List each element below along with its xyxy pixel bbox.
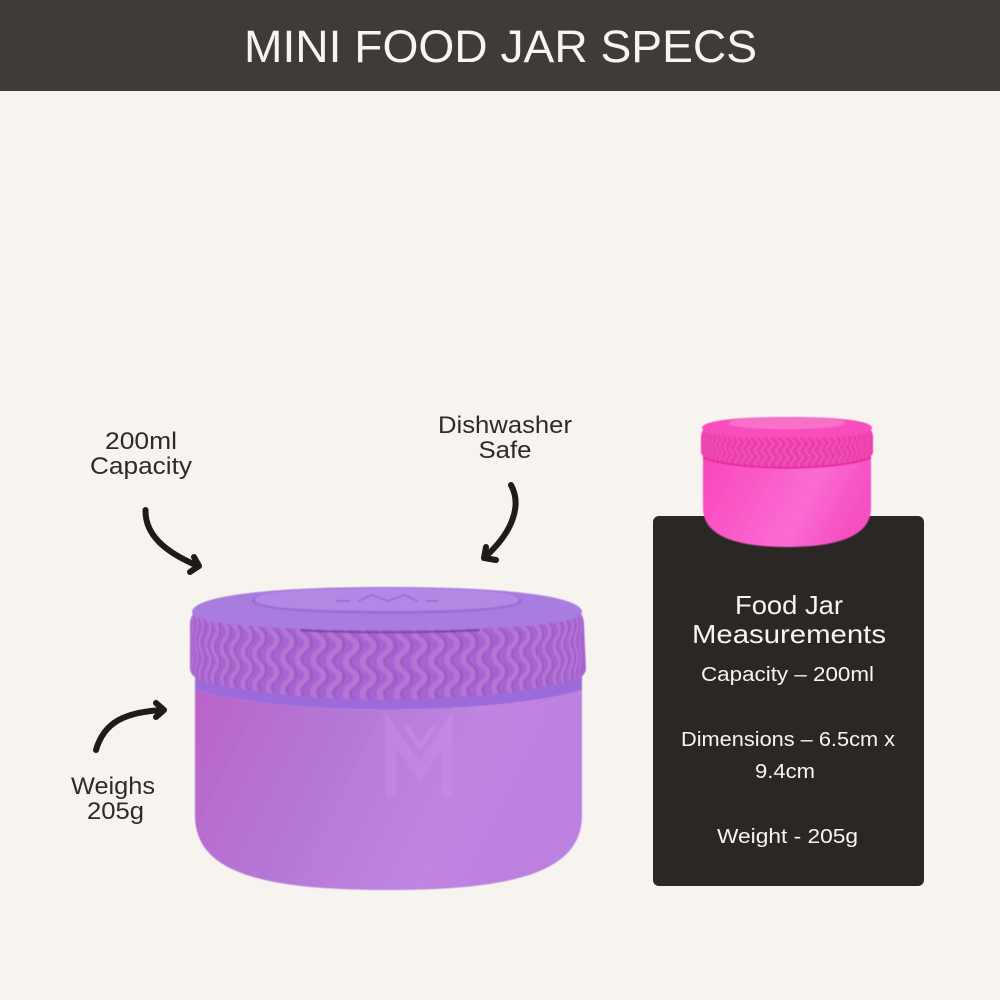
panel spec list: 9.4cm (755, 760, 815, 783)
lid logo (336, 595, 438, 601)
arrow: dishwasher safe to jar lid (484, 485, 516, 560)
panel heading: Food Jar (735, 590, 843, 620)
panel spec list: Dimensions – 6.5cm x (681, 728, 896, 751)
neck band (195, 665, 582, 710)
arrow: weighs to jar body (96, 703, 164, 750)
small jar body (703, 450, 871, 547)
small jar lid (702, 417, 872, 438)
small pink jar (701, 417, 873, 547)
panel heading: Measurements (692, 619, 886, 649)
lid disc (252, 588, 522, 614)
label: dishwasher safe: Dishwasher (438, 412, 572, 439)
large purple jar (190, 587, 586, 890)
label: 200ml capacity: 200ml (105, 428, 177, 455)
panel heading (692, 590, 886, 649)
label: dishwasher safe (438, 412, 572, 464)
measurements panel (653, 516, 924, 886)
title banner (0, 0, 1000, 91)
lid top (192, 587, 582, 630)
title banner: MINI FOOD JAR SPECS (244, 21, 757, 72)
panel spec list: Weight - 205g (717, 825, 858, 848)
label: weighs 205g (71, 773, 155, 825)
embossed logo (391, 726, 447, 797)
label: weighs 205g: Weighs (71, 773, 155, 800)
wavy grip ring (190, 600, 586, 718)
small jar wavy ring (701, 425, 873, 475)
label: 200ml capacity (90, 428, 192, 480)
small jar neck line (703, 450, 871, 469)
panel spec list: Capacity – 200ml (701, 663, 874, 686)
label: 200ml capacity: Capacity (90, 453, 192, 480)
label: dishwasher safe: Safe (478, 437, 532, 464)
gap shadow under lid (300, 630, 480, 632)
panel spec list (681, 663, 896, 848)
label: weighs 205g: 205g (87, 798, 144, 825)
jar body (195, 690, 582, 890)
small jar lid disc (729, 418, 845, 429)
arrow: capacity to jar lid (145, 510, 199, 572)
